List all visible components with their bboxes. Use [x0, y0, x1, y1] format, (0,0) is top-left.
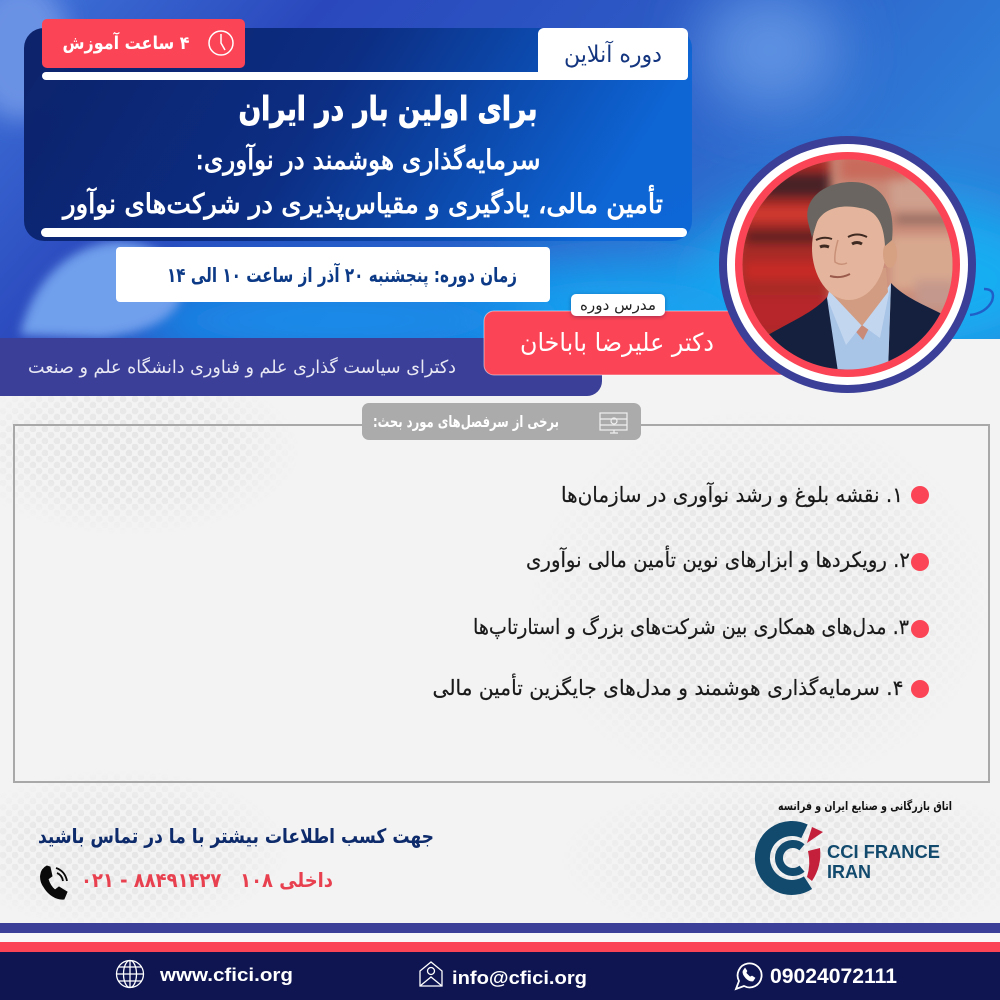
topic 1: ۱. نقشه بلوغ و رشد نوآوری در سازمان‌ها	[561, 482, 903, 507]
phone numbers: داخلی ۱۰۸ ۸۸۴۹۱۴۲۷ - ۰۲۱	[81, 868, 333, 892]
panel: course topics	[14, 403, 989, 782]
tricolour stripes	[0, 923, 1000, 952]
portrait photo	[735, 155, 960, 372]
phone: 09024072111	[770, 965, 897, 988]
icon: monitor	[600, 413, 627, 433]
contact heading: جهت کسب اطلاعات بیشتر با ما در تماس باشید	[38, 824, 434, 848]
icon: phone	[41, 866, 67, 899]
shirt	[827, 285, 891, 372]
icon: email	[420, 962, 442, 986]
instructor name box: دکتر علیرضا باباخان	[520, 328, 714, 357]
instructor chip: مدرس دوره	[580, 296, 656, 314]
instructor chip	[571, 294, 665, 316]
email: info@cfici.org	[452, 968, 587, 988]
subtitle line 2: تأمین مالی، یادگیری و مقیاس‌پذیری در شرکت‌های نوآور	[61, 184, 663, 220]
topics header chip: برخی از سرفصل‌های مورد بحث:	[373, 412, 559, 431]
tab: online course	[538, 28, 688, 80]
date box	[116, 247, 550, 302]
icon: clock	[209, 31, 233, 55]
bottom white rule	[41, 228, 687, 237]
tab: online course: دوره آنلاین	[564, 40, 662, 68]
footer bar	[0, 952, 1000, 1000]
badge: 4 hours of training	[42, 19, 245, 68]
topics header chip	[362, 403, 641, 440]
purple credentials band	[0, 338, 602, 396]
purple credentials band: دکترای سیاست گذاری علم و فناوری دانشگاه علم و صنعت	[28, 356, 456, 378]
top white rule	[42, 72, 688, 80]
topic 3: ۳. مدل‌های همکاری بین شرکت‌های بزرگ و استارتاپ‌ها	[473, 615, 909, 639]
topic 4: ۴. سرمایه‌گذاری هوشمند و مدل‌های جایگزین تأمین مالی	[432, 673, 904, 700]
website: www.cfici.org	[159, 965, 293, 985]
halftone dot texture	[0, 365, 1000, 930]
neck	[828, 268, 888, 326]
hero photo background	[0, 0, 1000, 365]
logo mark	[762, 827, 823, 887]
badge: 4 hours of training: ۴ ساعت آموزش	[62, 31, 190, 54]
logo: CCI France Iran: IRAN	[827, 861, 871, 882]
panel: course title	[24, 28, 692, 241]
topic 2: ۲. رویکردها و ابزارهای نوین تأمین مالی نوآوری	[526, 545, 910, 572]
eyes, brows and mouth	[816, 234, 867, 277]
icon: whatsapp	[736, 963, 762, 989]
instructor portrait	[719, 136, 976, 393]
subtitle line 1: سرمایه‌گذاری هوشمند در نوآوری:	[196, 144, 540, 176]
hair	[807, 182, 893, 246]
date box: زمان دوره: پنجشنبه ۲۰ آذر از ساعت ۱۰ الی ۱۴	[167, 262, 517, 288]
suit	[768, 283, 945, 372]
logo wordmark: CCI FRANCE	[827, 841, 940, 862]
main title: برای اولین بار در ایران	[238, 89, 538, 129]
portrait rings	[719, 136, 976, 393]
icon: globe	[116, 960, 144, 988]
instructor name box	[484, 311, 804, 375]
chamber name: اتاق بازرگانی و صنایع ایران و فرانسه	[778, 799, 952, 814]
face	[812, 206, 885, 300]
logo: CCI France Iran	[762, 799, 952, 887]
